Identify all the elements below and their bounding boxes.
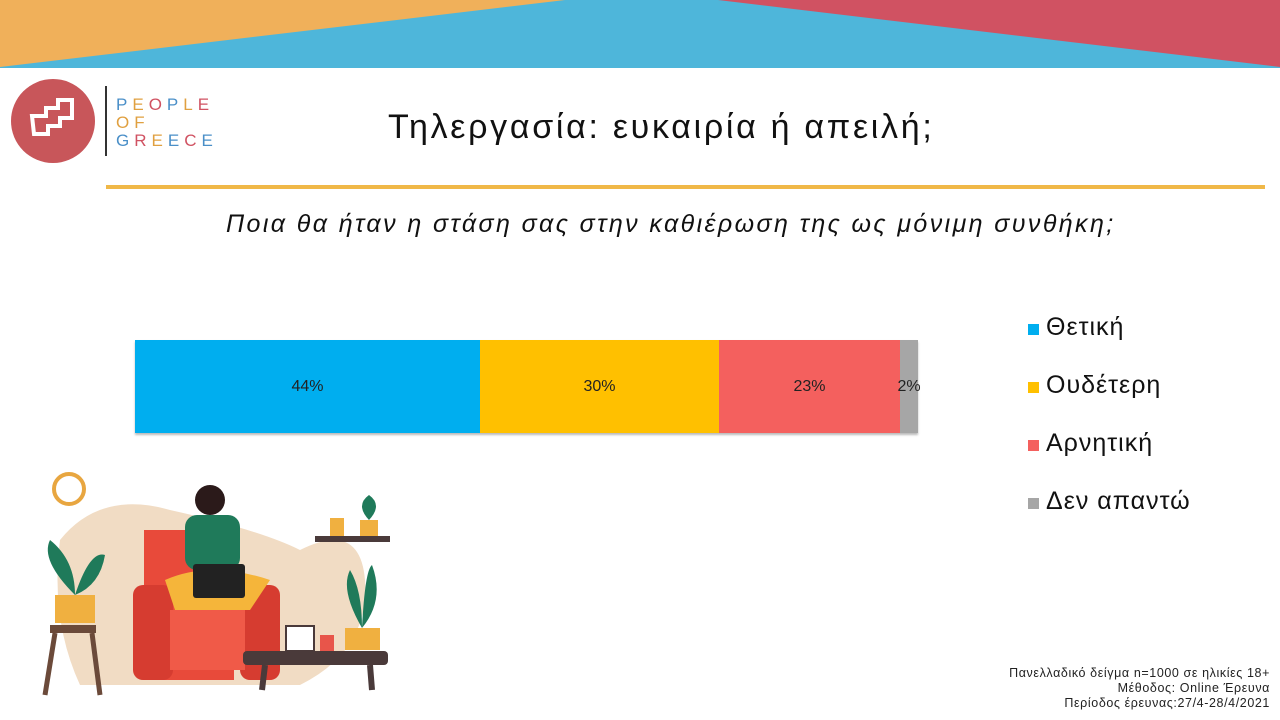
logo text: PEOPLE [116,95,214,114]
legend [1028,313,1191,515]
logo text: GREECE [116,131,218,150]
subtitle question: Ποια θα ήταν η στάση σας στην καθιέρωση της ως μόνιμη συνθήκη; [226,210,1116,238]
legend: Θετική [1046,313,1124,341]
legend: Αρνητική [1046,429,1153,457]
footnote: Πανελλαδικό δείγμα n=1000 σε ηλικίες 18+ [1009,666,1270,680]
stacked bar chart: 2% [897,378,921,394]
stacked bar chart: 23% [793,378,826,394]
logo text [116,95,218,150]
footnote: Περίοδος έρευνας:27/4-28/4/2021 [1064,696,1270,710]
top banner [0,0,1280,68]
footnote: Μέθοδος: Online Έρευνα [1118,681,1270,695]
footnote [1009,666,1270,710]
stacked bar chart: 44% [291,378,324,394]
legend: Ουδέτερη [1046,371,1161,399]
stacked bar chart [135,340,918,433]
stacked bar chart: 30% [583,378,616,394]
logo [11,79,218,163]
illustration: woman working from home [42,472,390,696]
title: Τηλεργασία: ευκαιρία ή απειλή; [388,108,935,146]
legend: Δεν απαντώ [1046,487,1191,515]
logo circle [11,79,95,163]
logo text: OF [116,113,150,132]
